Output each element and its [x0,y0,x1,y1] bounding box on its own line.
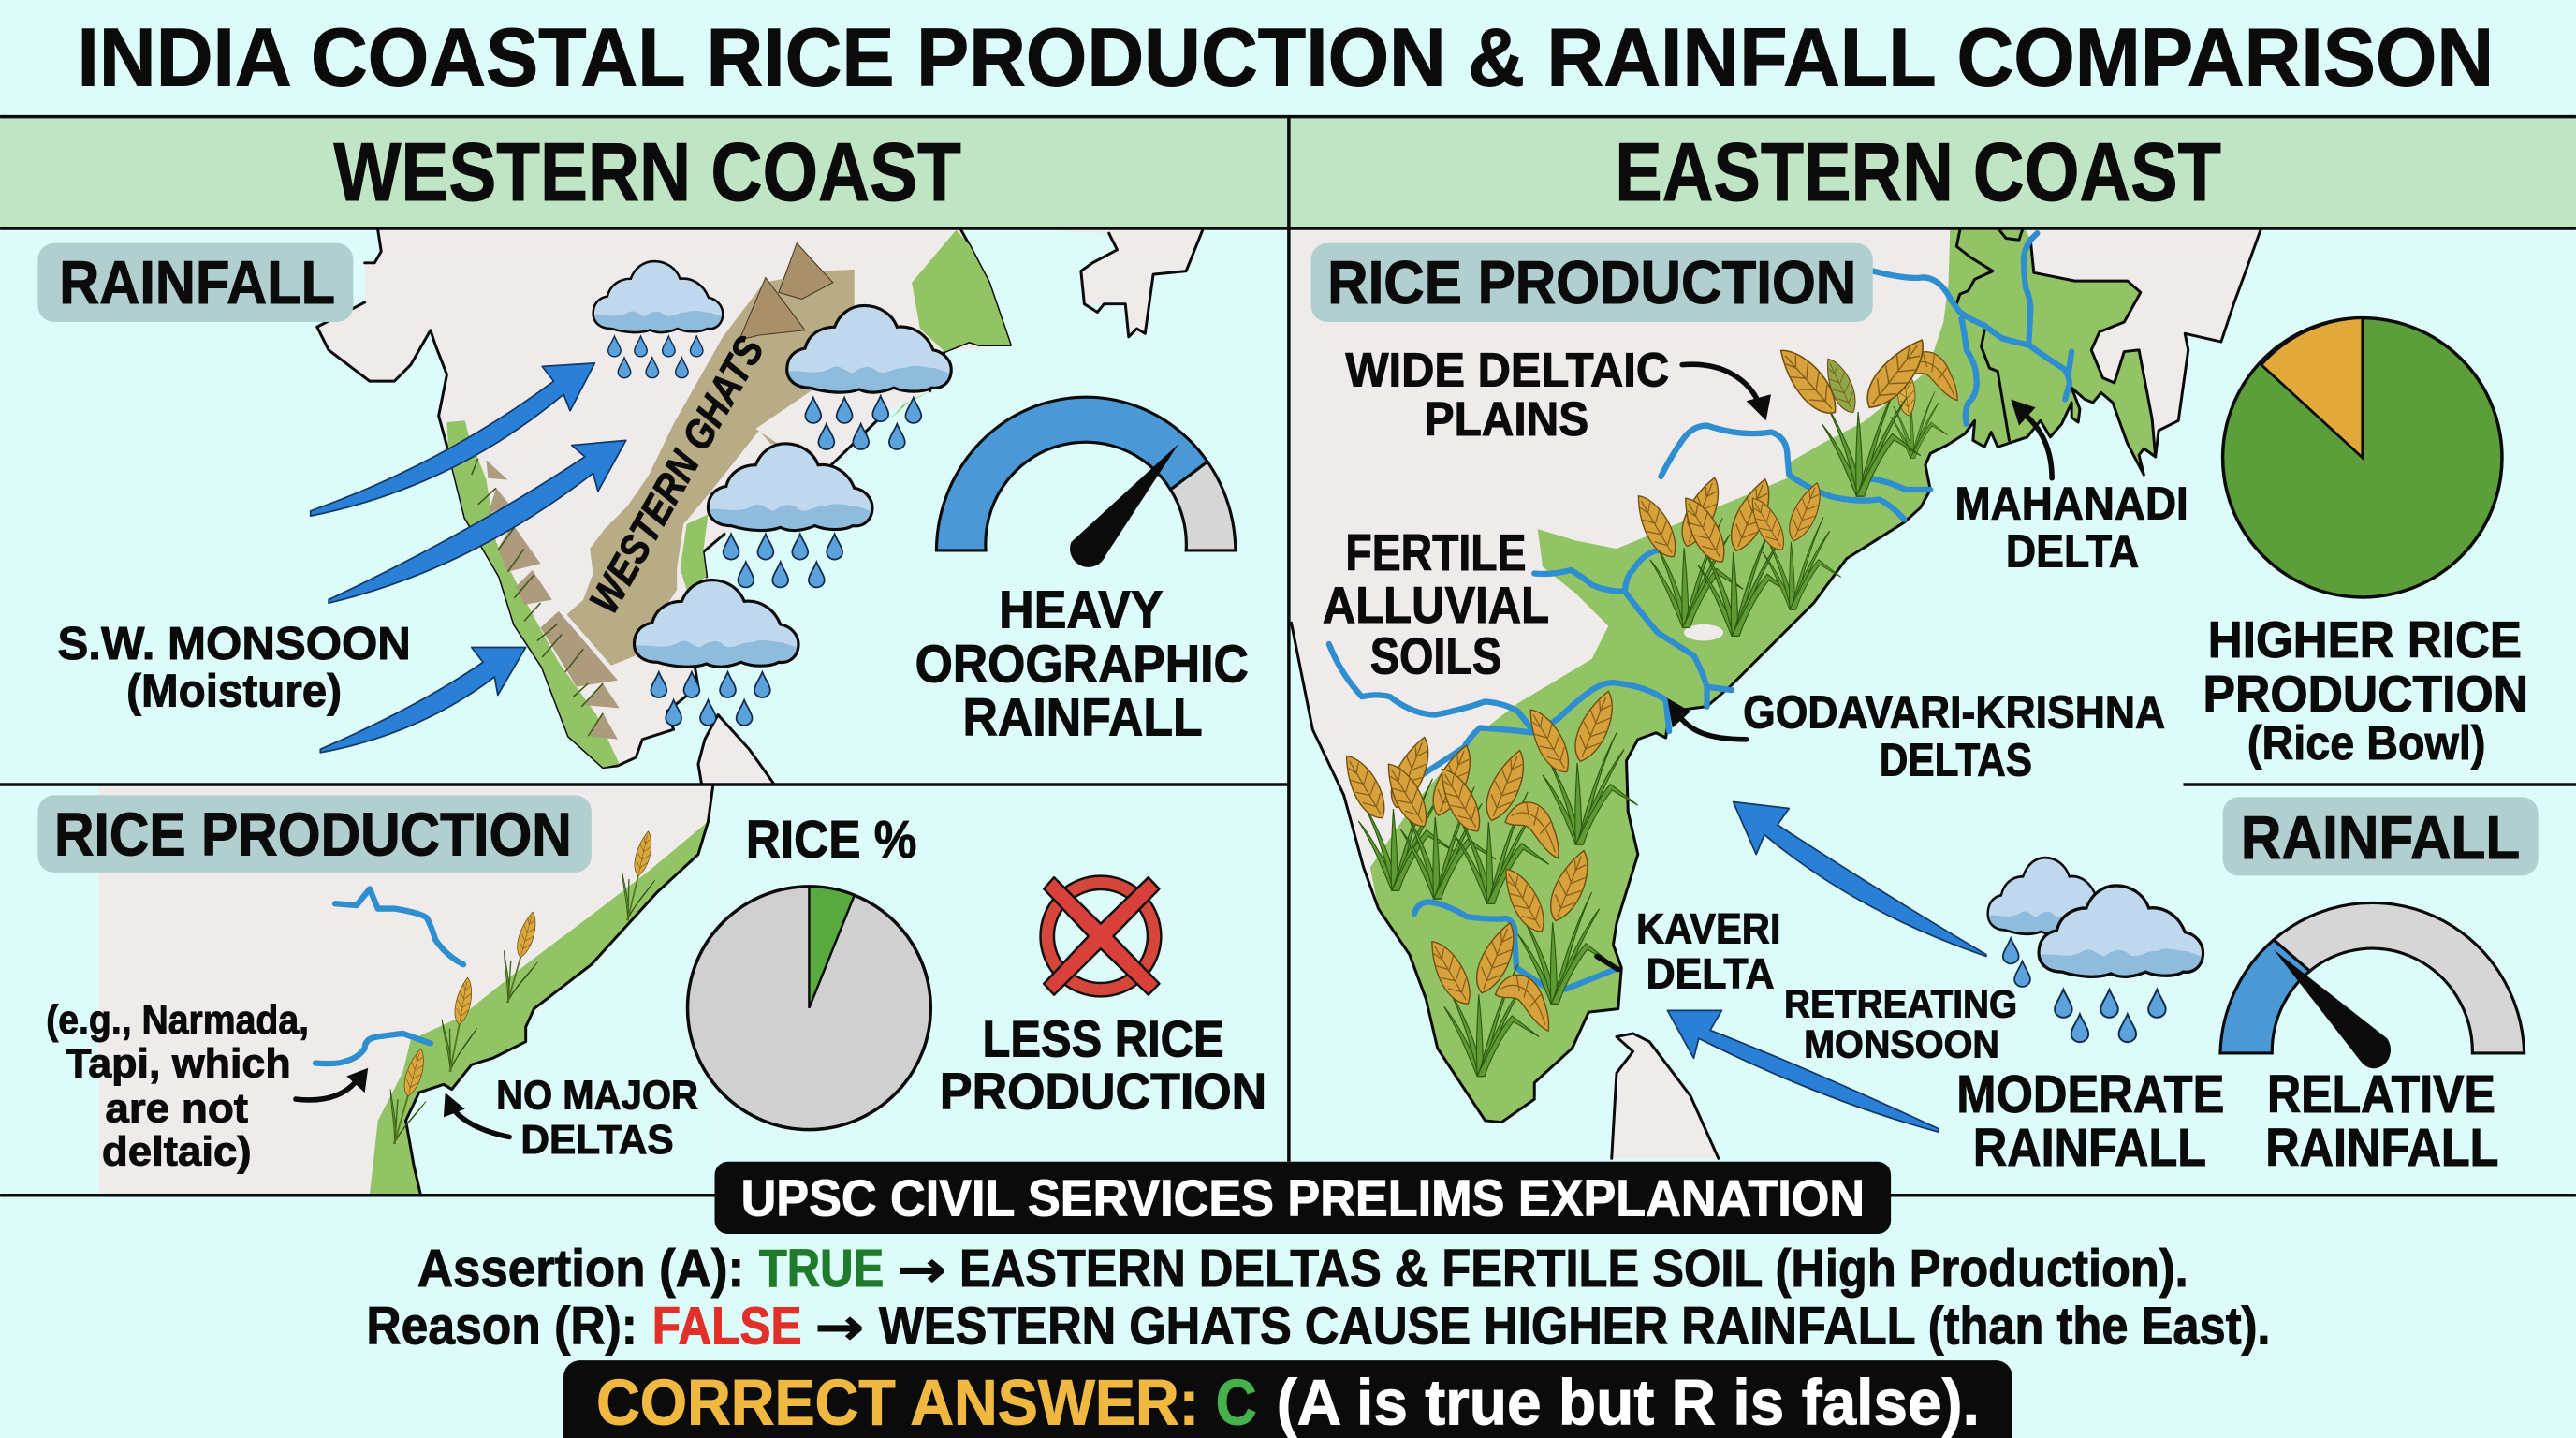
label: rivers not deltaic: (e.g., Narmada, [46,997,309,1043]
rice plants [376,828,666,1149]
rice cluster: central [1629,473,1841,636]
pie chart: east rice share [2223,318,2502,597]
map: sea cover right of coast [406,785,713,1195]
map: western India land [317,230,1010,768]
clouds with rain [1988,858,2203,1042]
label: higher rice production: HIGHER RICE [2208,611,2522,668]
label: less rice production: PRODUCTION [940,1064,1266,1121]
title: INDIA COASTAL RICE PRODUCTION & RAINFALL COMPARISON [78,11,2494,103]
panel: western coast rainfall [37,230,1249,784]
arrow: to river mouth [296,1068,368,1100]
label: rivers not deltaic [46,997,309,1174]
cloud with rain 3 [708,444,872,587]
rivers [1329,233,2071,990]
map: eastern coastal green strip [681,230,1010,590]
label: rivers not deltaic: deltaic) [102,1128,252,1174]
label: Kaveri delta: DELTA [1647,950,1774,998]
label: heavy orographic rainfall: HEAVY [999,580,1164,638]
map: west coast green strip [446,420,620,768]
map: Western Ghats band [567,270,855,666]
map: coast outline [1292,230,2261,1123]
reason line: → [815,1299,864,1357]
reason line: WESTERN GHATS CAUSE HIGHER RAINFALL (than the East). [879,1297,2271,1356]
cloud with rain 4 [634,580,798,726]
river: Narmada Tapi [315,1034,431,1064]
label: fertile alluvial soils [1323,524,1549,685]
label: retreating monsoon: MONSOON [1804,1021,1999,1065]
label: rivers not deltaic: are not [105,1086,248,1132]
map: land [98,785,713,1195]
gauge: heavy rainfall [936,397,1236,567]
header band: western coast: WESTERN COAST [333,126,961,218]
gauge: relative rainfall [2220,902,2525,1068]
cloud with rain 1 [593,261,723,378]
label: Western Ghats: WESTERN GHATS [581,330,773,621]
label: higher rice production [2203,611,2528,770]
heading pill: rice production: RICE PRODUCTION [54,800,572,868]
label: moderate rainfall: MODERATE [1956,1064,2224,1123]
assertion line: EASTERN DELTAS & FERTILE SOIL (High Production). [959,1239,2188,1298]
arrow: retreating monsoon upper [1734,801,1986,956]
arrow: to Kaveri [1597,956,1618,969]
river: upper [335,888,463,964]
label: higher rice production: PRODUCTION [2203,666,2528,723]
arrow: retreating monsoon lower [1667,1010,1939,1132]
arrow: to coast [444,1093,509,1137]
map: west coast outline [317,230,1010,768]
map: Bengal border lines [1956,230,2156,457]
label: heavy orographic rainfall [915,580,1249,746]
banner: UPSC explanation: UPSC CIVIL SERVICES PRELIMS EXPLANATION [741,1170,1865,1227]
label: heavy orographic rainfall: OROGRAPHIC [915,634,1249,693]
rice cluster: south [1337,686,1638,1077]
label: S.W. monsoon [57,619,411,717]
arrow: monsoon 3 [320,647,526,753]
map: Sri Lanka [1612,1034,1719,1158]
map: Sri Lanka fragment [698,714,774,784]
arrow: to plains [1682,364,1771,420]
rice cluster: north [1771,331,1958,496]
label: moderate rainfall: RAINFALL [1973,1118,2206,1177]
pie chart: west rice share [688,887,930,1130]
label: retreating monsoon [1784,981,2017,1065]
label: heavy orographic rainfall: RAINFALL [963,687,1203,746]
map: green eastern coastal plain and Bengal [1370,230,2156,1123]
label: wide deltaic plains: PLAINS [1425,392,1588,446]
label: retreating monsoon: RETREATING [1784,981,2017,1025]
label: Kaveri delta: KAVERI [1636,904,1781,952]
label: Godavari-Krishna deltas: GODAVARI-KRISHNA [1743,687,2165,738]
banner: correct answer: CORRECT ANSWER: [596,1367,1199,1438]
reason line [366,1297,2271,1357]
label: Kaveri delta [1636,904,1781,998]
reason line: FALSE [652,1297,802,1356]
label: S.W. monsoon: (Moisture) [126,667,342,717]
arrow: to Mahanadi delta [2011,399,2052,478]
label: relative rainfall: RAINFALL [2265,1118,2498,1177]
label: rice percent: RICE % [746,810,916,869]
label: relative rainfall [2265,1064,2498,1177]
panel: western coast rice production [37,785,1266,1195]
panel: explanation [366,1162,2271,1438]
assertion line [417,1239,2188,1299]
header band: eastern coast: EASTERN COAST [1615,126,2221,218]
mountains: Ghats peaks [739,243,833,340]
assertion line: TRUE [759,1239,884,1298]
label: less rice production: LESS RICE [983,1010,1224,1067]
map: gap in green plain [1684,624,1723,640]
label: no major deltas [496,1073,698,1163]
cloud with rain 2 [787,305,951,449]
label: no major deltas: NO MAJOR [496,1073,698,1119]
label: wide deltaic plains: WIDE DELTAIC [1345,343,1669,396]
map: Sri Lanka outline [1612,1034,1719,1158]
label: Mahanadi delta: MAHANADI [1955,479,2188,530]
arrow: monsoon 1 [311,363,594,516]
panel: eastern coast map [1292,230,2539,1177]
label: fertile alluvial soils: ALLUVIAL [1323,577,1549,634]
map: land [1292,230,2261,1123]
map: Sri Lanka outline [698,714,774,784]
label: Godavari-Krishna deltas [1743,687,2165,785]
map: green coastal strip [370,822,708,1195]
label: fertile alluvial soils: FERTILE [1345,524,1526,581]
label: rivers not deltaic: Tapi, which [66,1040,291,1086]
label: Mahanadi delta [1955,479,2188,577]
label: wide deltaic plains [1345,343,1669,446]
label: less rice production [940,1010,1266,1121]
heading pill: rice production: RICE PRODUCTION [1327,248,1856,316]
label: moderate rainfall [1956,1064,2224,1177]
mountains: small coastal peaks [472,459,620,740]
banner: correct answer: C [1216,1367,1257,1438]
banner: correct answer: (A is true but R is false). [1277,1367,1980,1438]
header band: western coast [0,118,1288,228]
label: fertile alluvial soils: SOILS [1370,628,1501,685]
header band: eastern coast [1288,118,2576,228]
label: S.W. monsoon: S.W. MONSOON [57,619,411,669]
label: higher rice production: (Rice Bowl) [2247,716,2485,770]
assertion line: → [897,1241,946,1299]
label: no major deltas: DELTAS [520,1117,674,1163]
heading pill: rainfall: RAINFALL [59,248,335,316]
label: Mahanadi delta: DELTA [2006,526,2139,577]
arrow: monsoon 2 [329,440,626,603]
map: upper right land [1044,230,1203,337]
label: Godavari-Krishna deltas: DELTAS [1880,735,2032,785]
map: coast outline [406,785,713,1195]
icon: red cross circle [1041,876,1161,996]
arrow: to Godavari-Krishna [1667,698,1747,740]
label: relative rainfall: RELATIVE [2267,1064,2496,1123]
map: upper right coast [1081,230,1203,337]
heading pill: rainfall: RAINFALL [2241,803,2520,872]
banner: correct answer [564,1360,2012,1438]
assertion line: Assertion (A): [417,1239,744,1298]
reason line: Reason (R): [366,1297,637,1356]
